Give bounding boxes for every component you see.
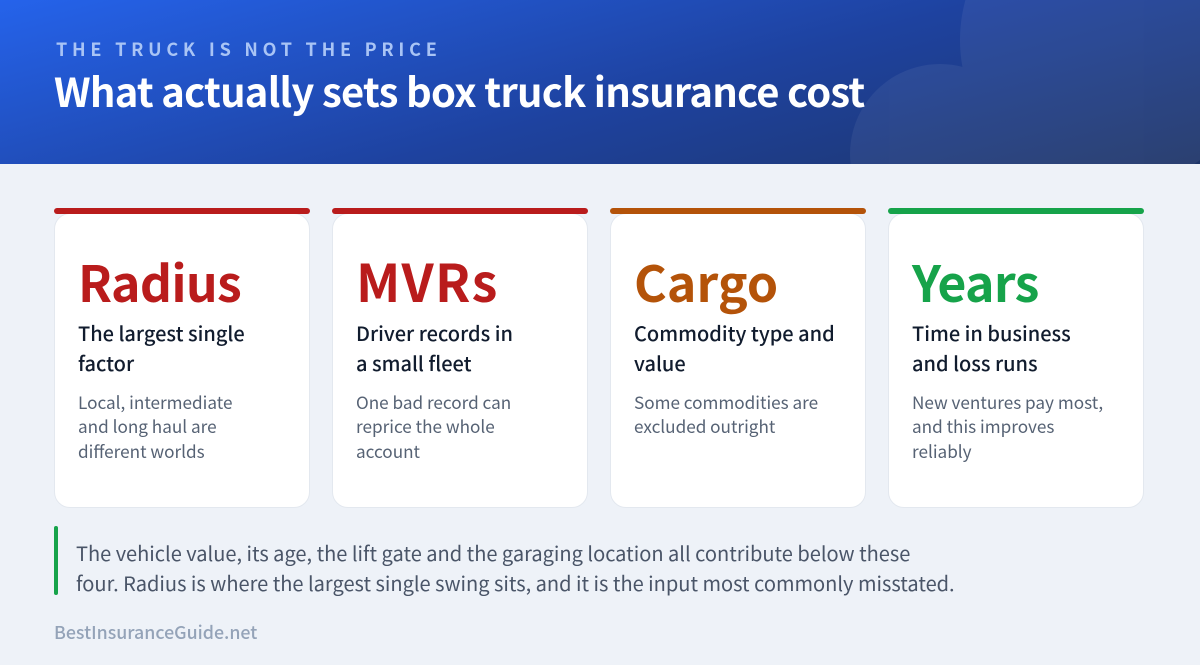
callout note [54, 526, 955, 597]
note text [76, 538, 955, 597]
note text: four. Radius is where the largest single swing sits, and it is the input most commonly misstated. [76, 568, 955, 597]
card: MVRs: reprice the whole [356, 413, 495, 438]
card: Years: and loss runs [912, 348, 1038, 377]
card: Years: reliably [912, 438, 972, 463]
card: Cargo: Cargo [634, 245, 778, 317]
card: Radius: The largest single [78, 318, 245, 347]
card: Years [888, 208, 1144, 508]
card: Years: Time in business [912, 318, 1071, 347]
card: Cargo: Commodity type and [634, 318, 835, 347]
card: Cargo: excluded outright [634, 413, 775, 438]
accent bar [54, 526, 58, 595]
card: Radius: Radius [78, 245, 241, 317]
card: Radius: and long haul are [78, 413, 217, 438]
card: MVRs [332, 208, 588, 508]
card: Cargo: value [634, 348, 686, 377]
card: Cargo: Some commodities are [634, 389, 818, 414]
note text: The vehicle value, its age, the lift gate and the garaging location all contribute below these [76, 538, 910, 567]
card: Radius: different worlds [78, 438, 205, 463]
decorative circles [850, 0, 1200, 164]
card: Radius [54, 208, 310, 508]
header banner [0, 0, 1200, 164]
card: Years: and this improves [912, 413, 1054, 438]
card: Cargo [610, 208, 866, 508]
card: Years: New ventures pay most, [912, 389, 1103, 414]
card: MVRs: a small fleet [356, 348, 472, 377]
title: What actually sets box truck insurance cost [54, 61, 865, 119]
eyebrow: THE TRUCK IS NOT THE PRICE [56, 36, 442, 62]
card: MVRs: One bad record can [356, 389, 511, 414]
card: MVRs: MVRs [356, 242, 499, 317]
card: Radius: Local, intermediate [78, 389, 232, 414]
footer brand: BestInsuranceGuide.net [54, 619, 257, 645]
card: MVRs: account [356, 438, 420, 463]
card: MVRs: Driver records in [356, 318, 513, 347]
card: Years: Years [912, 245, 1039, 317]
card: Radius: factor [78, 348, 134, 377]
